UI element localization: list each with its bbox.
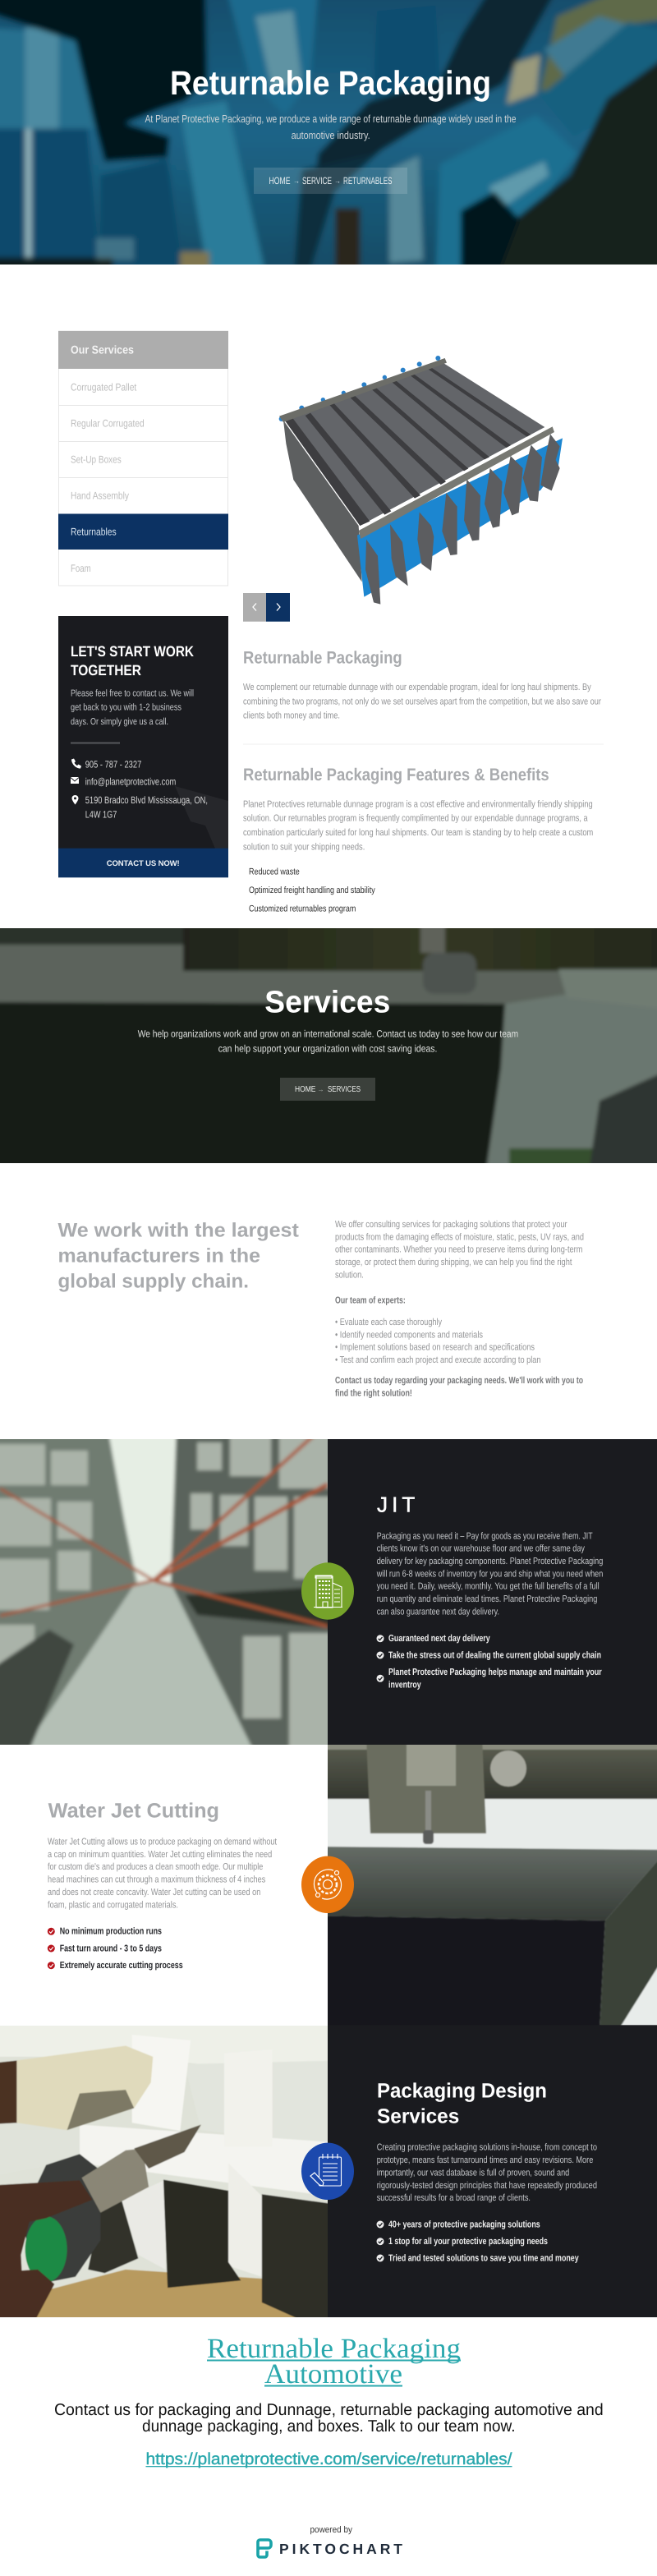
- experts label: Our team of experts:: [335, 1296, 406, 1306]
- call to action text: Contact us today regarding your packaging needs. We'll work with you to: [335, 1376, 583, 1386]
- paragraph: [48, 1838, 278, 1910]
- logo mark: [258, 2540, 271, 2557]
- checklist: Guaranteed next day delivery: [388, 1634, 490, 1644]
- paragraph: a cap on minimum quantities. Water Jet cutting eliminates the need: [48, 1850, 272, 1860]
- intro paragraph: storage, or protect them during shipping, we can help you find the right: [335, 1258, 572, 1267]
- checklist: [376, 2220, 579, 2263]
- active menu item background: [58, 514, 228, 550]
- paragraph: delivery for key packaging components. Planet Protective Packaging: [377, 1557, 603, 1566]
- menu items: Corrugated Pallet: [71, 381, 137, 393]
- benefits list: Customized returnables program: [249, 904, 356, 913]
- paragraph: successful results for a broad range of clients.: [377, 2193, 531, 2203]
- menu items: Hand Assembly: [71, 490, 130, 502]
- heading: JIT: [377, 1492, 415, 1516]
- panel: water jet cutting: [48, 1799, 278, 1971]
- card text: get back to you with 1-2 business: [71, 702, 181, 712]
- heading: We work with the largest: [57, 1219, 299, 1241]
- footer text: [54, 2401, 604, 2436]
- heading: Returnable Packaging: [243, 648, 402, 667]
- carousel next button: [266, 593, 290, 622]
- breadcrumb: RETURNABLES: [343, 175, 393, 186]
- checklist: Planet Protective Packaging helps manage and maintain your: [388, 1668, 602, 1677]
- call to action text: [335, 1376, 583, 1398]
- warehouse photo: [0, 1439, 328, 1745]
- card text: [71, 688, 194, 727]
- checklist: No minimum production runs: [60, 1927, 162, 1937]
- benefits list: Reduced waste: [249, 867, 300, 877]
- checklist: 40+ years of protective packaging solutions: [388, 2220, 540, 2229]
- paragraph: [243, 799, 593, 852]
- footer text: dunnage packaging, and boxes. Talk to our team now.: [142, 2417, 516, 2436]
- icon: phone: [71, 759, 81, 769]
- menu header: Our Services: [71, 343, 134, 356]
- heading: Water Jet Cutting: [48, 1799, 219, 1822]
- heading: manufacturers in the: [57, 1245, 260, 1267]
- menu items: [71, 381, 145, 574]
- checklist: Take the stress out of dealing the current global supply chain: [388, 1650, 601, 1660]
- paragraph: foam, plastic and corrugated materials.: [48, 1900, 178, 1910]
- checklist: Extremely accurate cutting process: [60, 1961, 183, 1971]
- services banner: [0, 928, 657, 1163]
- footer link title: Returnable Packaging: [207, 2334, 461, 2364]
- foam welding photo: [0, 2026, 328, 2317]
- icon: orange gear badge: [301, 1856, 354, 1913]
- banner description: can help support your organization with cost saving ideas.: [218, 1043, 437, 1055]
- banner title: Services: [264, 985, 390, 1019]
- paragraph: prototype, means fast turnaround times and easy revisions. More: [377, 2155, 593, 2165]
- icon: map pin: [72, 795, 79, 805]
- contact card: [58, 616, 228, 877]
- contact button: CONTACT US NOW!: [107, 859, 180, 868]
- paragraph: for custom die's and produces a clean smooth edge. Our multiple: [48, 1862, 263, 1872]
- footer link title: [207, 2334, 461, 2390]
- hero photo: robotic welding line: [0, 0, 657, 289]
- intro paragraph: other contaminants. Whether you need to preserve items during long-term: [335, 1245, 582, 1255]
- section: supply chain intro: [57, 1219, 584, 1398]
- sidebar: our services menu: [58, 331, 228, 586]
- breadcrumb: HOME: [295, 1085, 316, 1094]
- panel: JIT: [301, 1439, 657, 1745]
- breadcrumb: [254, 168, 407, 194]
- paragraph: run quantity and eliminate lead times. Planet Protective Packaging: [377, 1594, 597, 1604]
- paragraph: clients know it's on our warehouse floor and we offer same day: [377, 1544, 585, 1554]
- hero description: [145, 113, 516, 141]
- menu items: Returnables: [71, 527, 117, 538]
- paragraph: importantly, our vast database is full of proven, sound and: [377, 2168, 569, 2178]
- section: returnable packaging: [243, 648, 601, 721]
- paragraph: clients both money and time.: [243, 711, 340, 721]
- menu items: Set-Up Boxes: [71, 454, 122, 466]
- heading: Packaging Design: [377, 2080, 547, 2103]
- paragraph: Creating protective packaging solutions in-house, from concept to: [377, 2143, 597, 2153]
- hero title: Returnable Packaging: [170, 64, 491, 102]
- icon: blue notepad badge: [301, 2143, 354, 2200]
- card title: TOGETHER: [71, 662, 141, 678]
- checklist: [376, 1634, 602, 1690]
- paragraph: and does not create concavity. Water Jet cutting can be used on: [48, 1888, 260, 1898]
- icon: green building badge: [301, 1562, 354, 1620]
- logo wordmark: PIKTOCHART: [279, 2541, 402, 2557]
- menu items: Regular Corrugated: [71, 417, 145, 429]
- hero description: automotive industry.: [292, 129, 370, 141]
- checklist: Fast turn around - 3 to 5 days: [60, 1944, 162, 1953]
- breadcrumb: SERVICE: [302, 175, 332, 186]
- intro paragraph: products from the damaging effects of moisture, static, pests, UV rays, and: [335, 1232, 584, 1242]
- icon: mail: [71, 777, 79, 784]
- call to action text: find the right solution!: [335, 1388, 412, 1398]
- paragraph: Packaging as you need it – Pay for goods as you receive them. JIT: [377, 1531, 593, 1541]
- footer text: Contact us for packaging and Dunnage, returnable packaging automotive and: [54, 2401, 604, 2419]
- contact button: [58, 849, 228, 877]
- address: [85, 794, 208, 820]
- footer url: https://planetprotective.com/service/returnables/: [146, 2450, 512, 2468]
- card text: days. Or simply give us a call.: [71, 717, 168, 727]
- benefits list: [249, 867, 375, 913]
- email: info@planetprotective.com: [85, 776, 176, 788]
- carousel previous button: [243, 593, 266, 622]
- paragraph: can also guarantee next day delivery.: [377, 1608, 499, 1617]
- intro paragraph: We offer consulting services for packaging solutions that protect your: [335, 1220, 567, 1230]
- benefits list: Optimized freight handling and stability: [249, 886, 375, 895]
- checklist: [48, 1927, 183, 1971]
- card text: Please feel free to contact us. We will: [71, 688, 194, 698]
- menu items: Foam: [71, 563, 91, 574]
- paragraph: rigorously-tested design principles that have repeatedly produced: [377, 2181, 597, 2191]
- heading: global supply chain.: [57, 1270, 249, 1292]
- panel: packaging design services: [301, 2025, 657, 2317]
- paragraph: Water Jet Cutting allows us to produce packaging on demand without: [48, 1838, 278, 1847]
- breadcrumb: HOME: [269, 175, 291, 186]
- paragraph: you need it. Daily, weekly, monthly. You get the full benefits of a full: [377, 1582, 600, 1592]
- menu header: [58, 331, 228, 369]
- hero banner: returnable packaging: [0, 0, 657, 289]
- piktochart logo: [258, 2540, 402, 2557]
- paper plane watermark: [175, 786, 228, 849]
- product photo: returnable dunnage rack: [279, 356, 563, 605]
- breadcrumb: →: [317, 1085, 324, 1093]
- experts list: • Implement solutions based on research and specifications: [335, 1343, 535, 1353]
- phone number: 905 - 787 - 2327: [85, 759, 142, 770]
- card title: LET'S START WORK: [71, 643, 194, 660]
- paragraph: [243, 683, 601, 721]
- card title: [71, 643, 194, 678]
- heading: Services: [377, 2104, 459, 2128]
- experts list: [335, 1318, 540, 1365]
- heading: Returnable Packaging Features & Benefits: [243, 766, 549, 784]
- heading: [377, 2080, 547, 2128]
- breadcrumb: SERVICES: [328, 1085, 361, 1094]
- hero description: At Planet Protective Packaging, we produce a wide range of returnable dunnage widely used in the: [145, 113, 516, 125]
- intro paragraph: solution.: [335, 1271, 364, 1281]
- experts list: • Test and confirm each project and execute according to plan: [335, 1355, 540, 1365]
- powered by label: powered by: [310, 2525, 352, 2535]
- address: 5190 Bradco Blvd Mississauga, ON,: [85, 794, 208, 806]
- banner description: [138, 1028, 518, 1055]
- water jet machine photo: [319, 1736, 657, 2034]
- breadcrumb: [280, 1078, 375, 1101]
- breadcrumb: →: [334, 177, 341, 186]
- address: L4W 1G7: [85, 808, 117, 820]
- footer link title: Automotive: [264, 2359, 402, 2390]
- checklist: inventroy: [388, 1680, 421, 1690]
- banner description: We help organizations work and grow on an international scale. Contact us today to see how our team: [138, 1028, 518, 1040]
- paragraph: [376, 1531, 603, 1617]
- experts list: • Evaluate each case thoroughly: [335, 1318, 442, 1327]
- paragraph: [377, 2143, 597, 2203]
- checklist: Tried and tested solutions to save you time and money: [388, 2253, 579, 2263]
- paragraph: head machines can cut through a maximum thickness of 4 inches: [48, 1875, 265, 1885]
- breadcrumb: →: [293, 177, 300, 186]
- paragraph: will run 6-8 weeks of inventory for you and ship what you need when: [376, 1569, 603, 1579]
- heading: [57, 1219, 299, 1292]
- paragraph: solution to suit your shipping needs.: [243, 842, 365, 852]
- intro paragraph: [335, 1220, 584, 1281]
- banner photo: foam cutting machine: [0, 928, 657, 1163]
- checklist: 1 stop for all your protective packaging needs: [388, 2237, 548, 2247]
- section: features and benefits: [243, 766, 593, 913]
- experts list: • Identify needed components and materials: [335, 1330, 483, 1340]
